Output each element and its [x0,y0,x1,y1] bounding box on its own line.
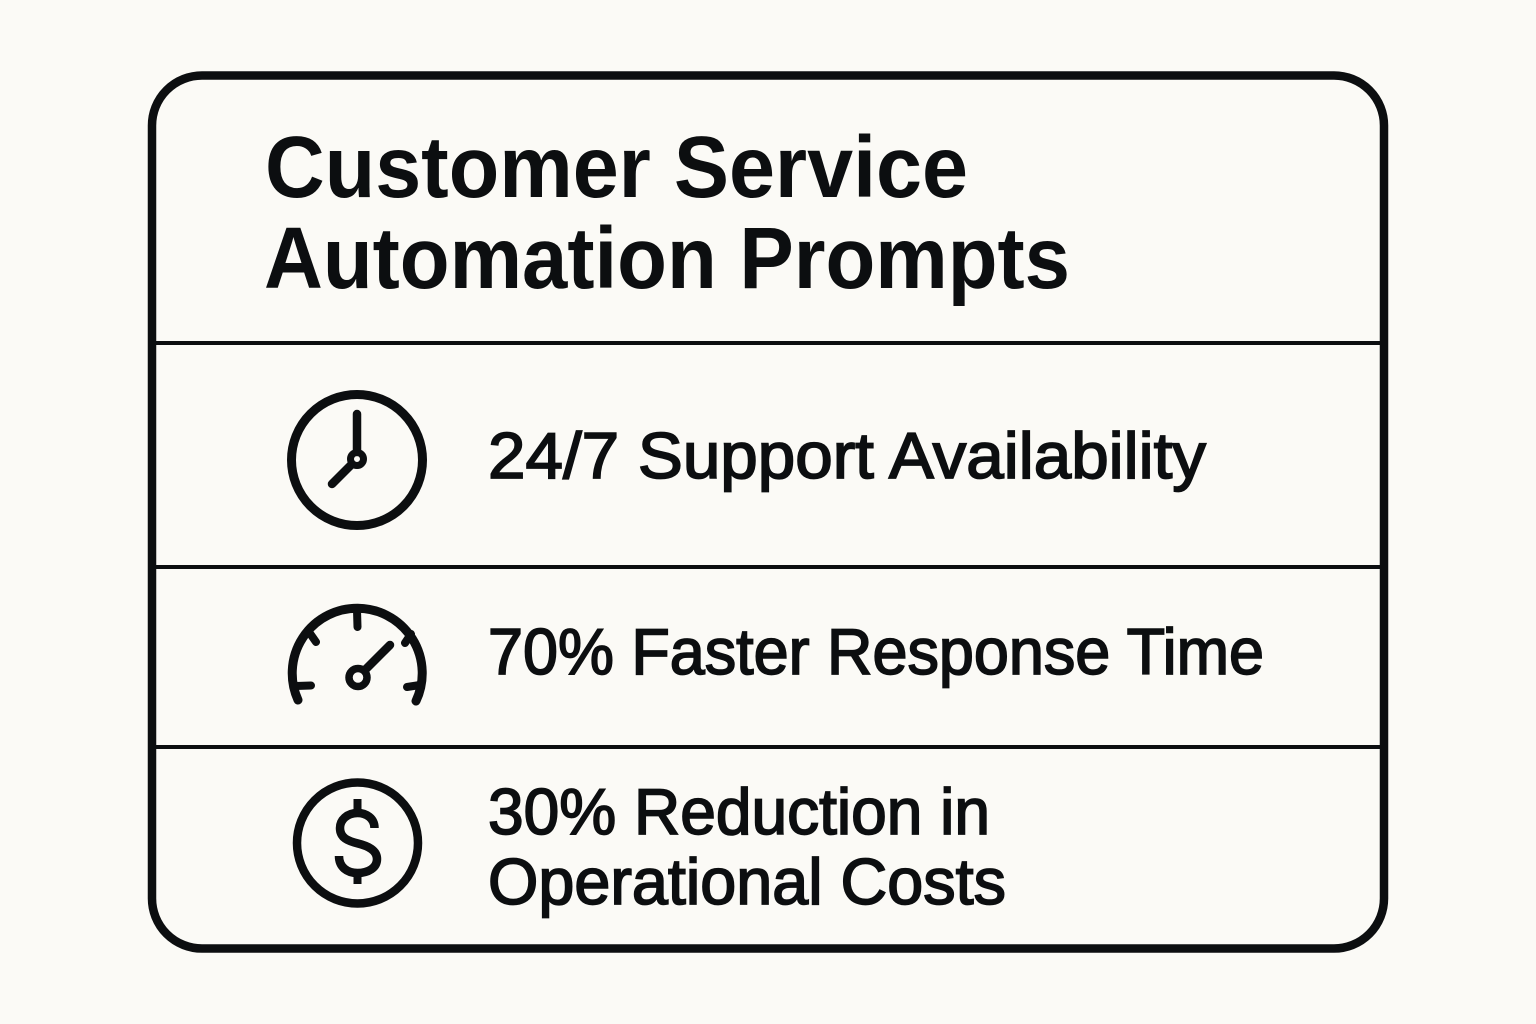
panel: card outline [152,76,1384,948]
text: 30% reduction: Operational Costs [488,845,1006,918]
icon: clock [292,394,422,526]
text: 24/7 support: 24/7 Support Availability [488,419,1207,492]
title: Automation Prompts [264,210,1070,307]
icon: dollar coin [297,782,418,904]
title [264,119,1070,307]
text: 30% reduction: 30% Reduction in [488,775,990,848]
text: 70% faster: 70% Faster Response Time [488,615,1264,688]
icon: speedometer gauge [292,608,422,701]
text: 30% reduction [488,775,1006,918]
title: Customer Service [265,119,968,216]
